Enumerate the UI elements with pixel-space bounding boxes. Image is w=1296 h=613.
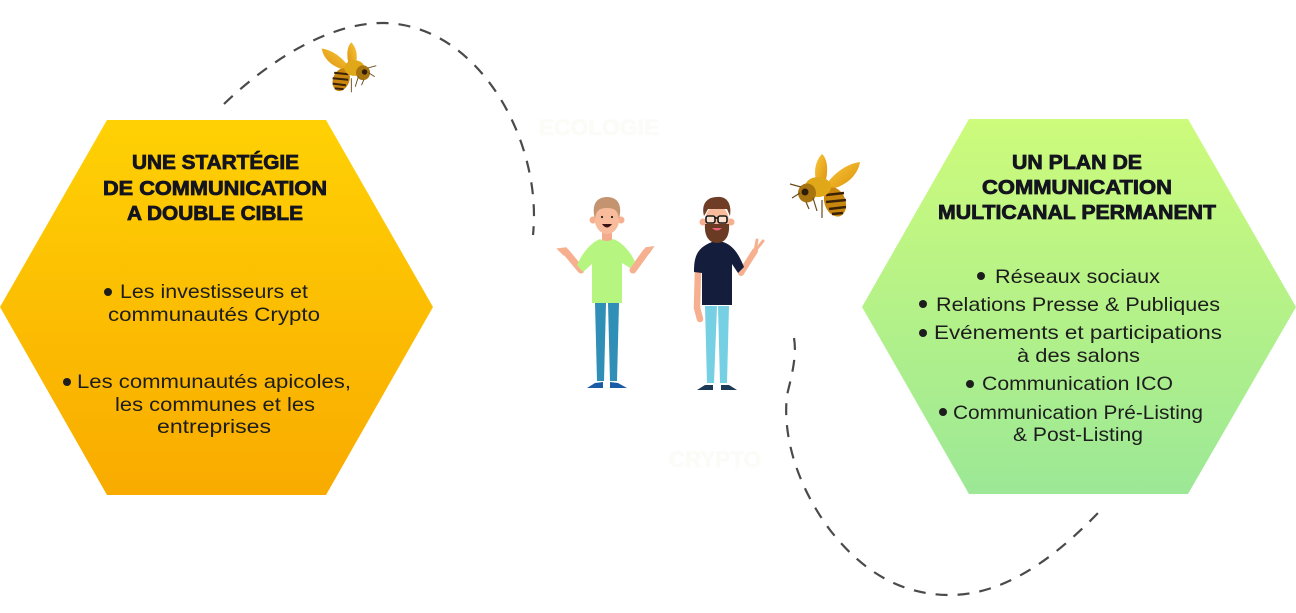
dashed flight path: top left bbox=[224, 23, 534, 235]
channel list: Evénements et participations bbox=[934, 322, 1222, 344]
text block: beekeeping communities: entreprises bbox=[157, 416, 271, 438]
heading: strategy: A DOUBLE CIBLE bbox=[127, 203, 303, 225]
text block: beekeeping communities: Les communautés apicoles, bbox=[77, 371, 351, 393]
text block: investors: communautés Crypto bbox=[108, 304, 320, 326]
channel list: Communication ICO bbox=[982, 373, 1173, 395]
channel list: & Post-Listing bbox=[1013, 424, 1143, 446]
heading: plan: MULTICANAL PERMANENT bbox=[938, 202, 1216, 224]
text block: beekeeping communities bbox=[63, 371, 351, 438]
heading: strategy bbox=[103, 151, 327, 225]
text block: investors bbox=[104, 281, 320, 326]
character: man in green t-shirt bbox=[558, 197, 653, 388]
faint label: ecologie: ECOLOGIE bbox=[539, 115, 659, 140]
icon: small bee bbox=[322, 42, 376, 94]
hexagon: yellow bbox=[0, 120, 433, 495]
heading: strategy: UNE STARTÉGIE bbox=[132, 151, 299, 174]
panel: double target strategy bbox=[0, 120, 433, 495]
faint label: crypto: CRYPTO bbox=[669, 447, 761, 472]
heading: strategy: DE COMMUNICATION bbox=[103, 178, 327, 200]
text block: investors: Les investisseurs et bbox=[120, 281, 309, 303]
text block: beekeeping communities: les communes et les bbox=[115, 394, 315, 416]
dashed flight path: bottom right bbox=[786, 338, 1098, 595]
hexagon: green bbox=[862, 119, 1296, 494]
icon: large bee bbox=[790, 154, 860, 220]
channel list: Communication Pré-Listing bbox=[953, 402, 1203, 424]
channel list: Relations Presse & Publiques bbox=[936, 294, 1220, 316]
heading: plan: COMMUNICATION bbox=[982, 177, 1172, 199]
channel list: à des salons bbox=[1017, 345, 1140, 367]
character: bearded man in navy t-shirt bbox=[694, 197, 763, 390]
heading: plan: UN PLAN DE bbox=[1012, 152, 1142, 174]
panel: multichannel plan bbox=[862, 119, 1296, 494]
heading: plan bbox=[938, 152, 1216, 224]
channel list: Réseaux sociaux bbox=[995, 266, 1160, 288]
channel list bbox=[919, 266, 1222, 446]
